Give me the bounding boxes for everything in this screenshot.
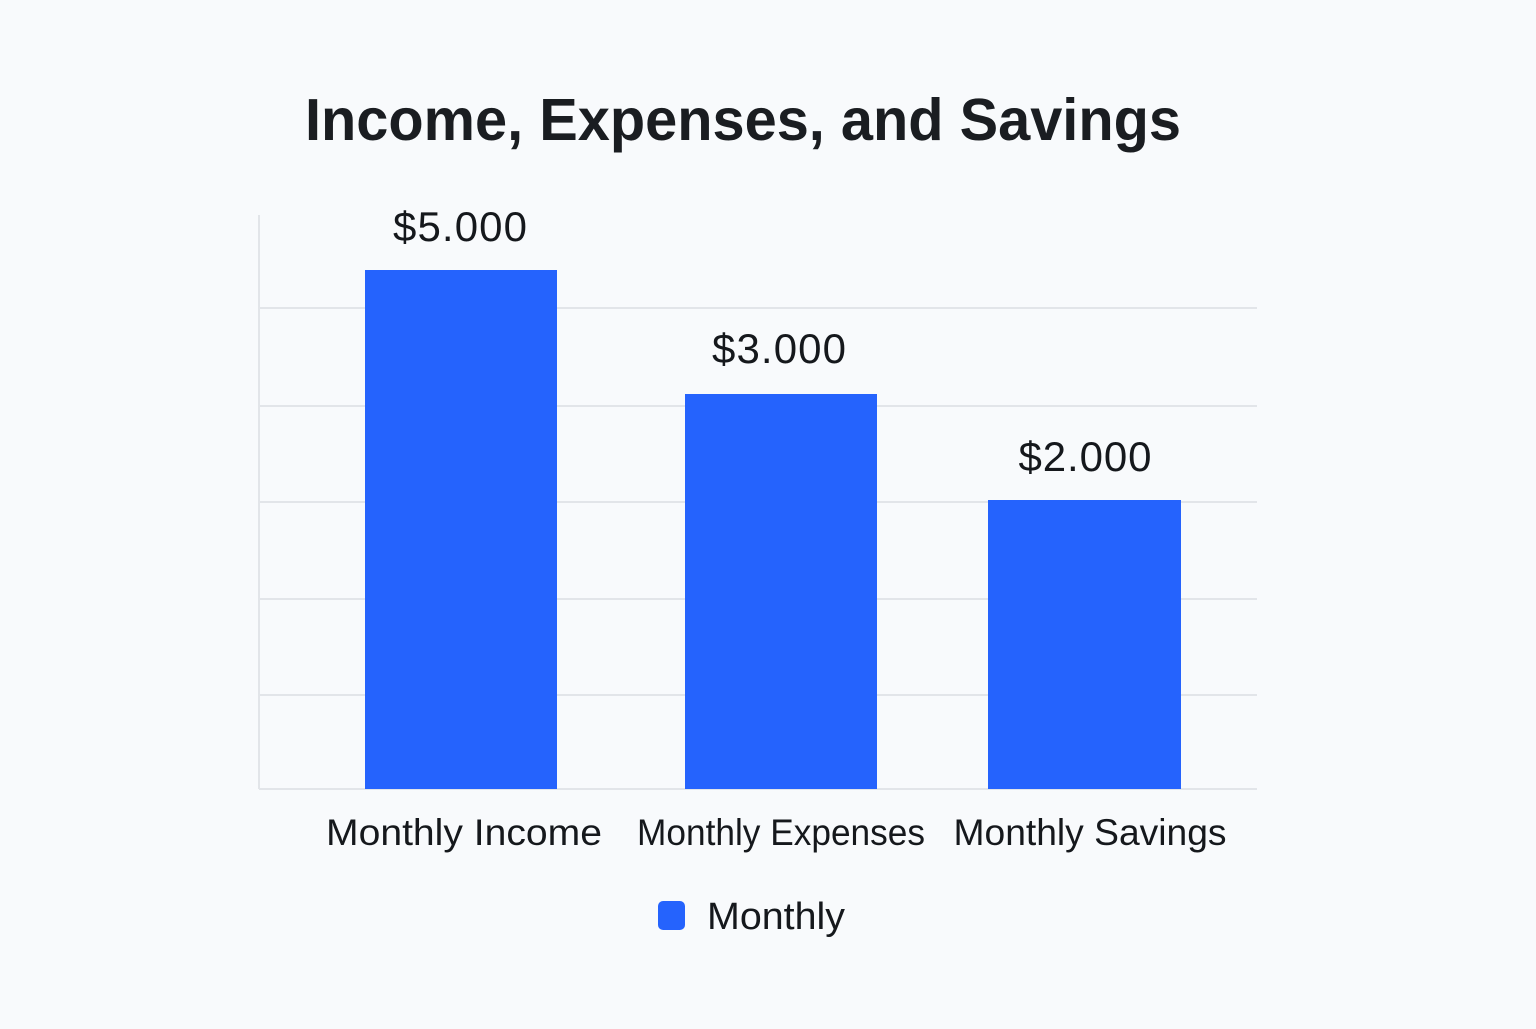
value labels: $3.000 <box>712 325 846 372</box>
value labels <box>393 203 1152 480</box>
bar: Monthly Income <box>365 270 557 789</box>
bar: Monthly Savings <box>988 500 1181 789</box>
category labels: Monthly Income <box>326 812 602 853</box>
category labels: Monthly Savings <box>954 812 1226 853</box>
category labels <box>326 812 1226 853</box>
value labels: $5.000 <box>393 203 527 250</box>
legend: Monthly <box>707 896 845 938</box>
category labels: Monthly Expenses <box>637 812 925 853</box>
bar: Monthly Expenses <box>685 394 877 789</box>
bar chart <box>259 203 1257 853</box>
title: Income, Expenses, and Savings <box>305 87 1181 153</box>
value labels: $2.000 <box>1018 433 1152 480</box>
